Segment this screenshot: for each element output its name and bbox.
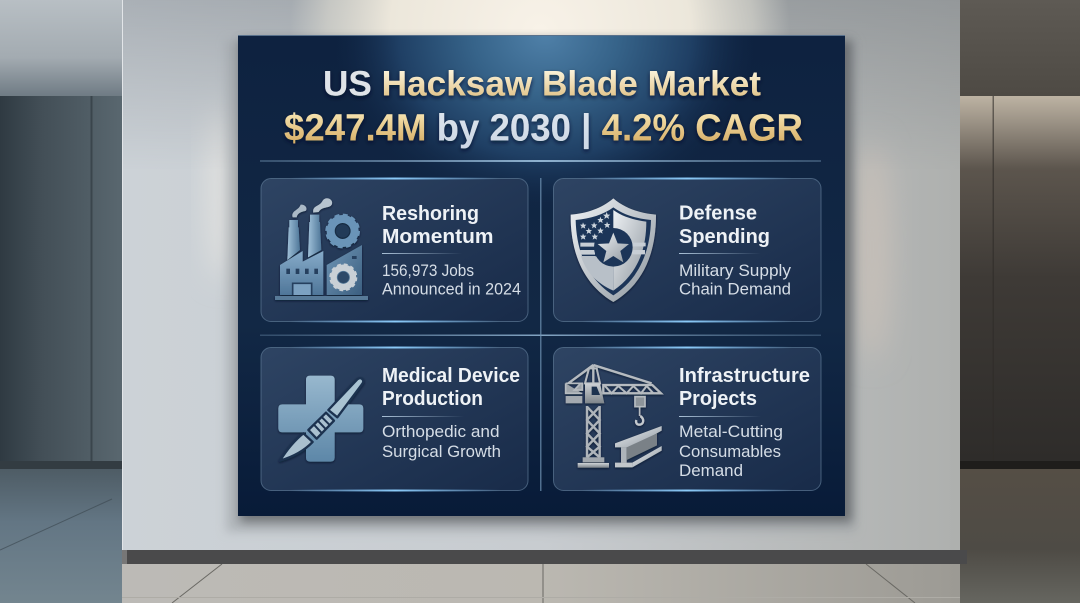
heading: defense spending: Defense	[679, 202, 757, 224]
text: 156,973 jobs announced in 2024: 156,973 Jobs	[382, 262, 474, 280]
heading: defense spending: Spending	[679, 225, 770, 248]
panel: medical device production	[261, 346, 528, 492]
icon: medical cross with scalpel	[278, 376, 363, 462]
text: metal-cutting consumables demand: Metal-Cutting	[679, 423, 783, 441]
header divider	[260, 160, 821, 162]
title line 1: US Hacksaw Blade Market	[323, 64, 761, 104]
heading: medical device production: Production	[382, 387, 483, 410]
icon: factory with gears	[275, 198, 368, 300]
heading: defense spending	[679, 202, 770, 248]
heading: infrastructure projects: Projects	[679, 387, 757, 410]
text: metal-cutting consumables demand: Demand	[679, 462, 743, 480]
navy display board	[238, 35, 845, 516]
icon: shield with star	[571, 198, 656, 302]
quadrant cross dividers	[260, 178, 821, 491]
text: 156,973 jobs announced in 2024: Announced in 2024	[382, 280, 521, 298]
heading: reshoring momentum: Momentum	[382, 225, 494, 248]
text: military supply chain demand: Chain Demand	[679, 280, 791, 298]
heading: medical device production	[382, 364, 520, 410]
text: metal-cutting consumables demand: Consumables	[679, 443, 781, 461]
background: left corridor	[0, 0, 122, 603]
text: 156,973 jobs announced in 2024	[382, 262, 521, 298]
panel: infrastructure projects	[554, 346, 821, 492]
title	[284, 64, 803, 150]
board shadow	[226, 40, 856, 532]
background: floor in front of wall	[122, 550, 967, 603]
text: military supply chain demand: Military Supply	[679, 262, 792, 280]
heading: infrastructure projects: Infrastructure	[679, 364, 810, 387]
title line 2: $247.4M by 2030 | 4.2% CAGR	[284, 108, 803, 150]
background: white feature wall	[122, 0, 960, 550]
heading: reshoring momentum: Reshoring	[382, 202, 479, 225]
panel: defense spending	[554, 178, 821, 322]
heading: reshoring momentum	[382, 202, 494, 248]
text: metal-cutting consumables demand	[679, 423, 783, 480]
icon: tower crane with steel beam	[566, 365, 662, 468]
text: military supply chain demand	[679, 262, 792, 298]
heading: infrastructure projects	[679, 364, 810, 410]
heading: medical device production: Medical Device	[382, 364, 520, 387]
text: orthopedic and surgical growth	[382, 423, 501, 461]
panel: reshoring momentum	[261, 178, 528, 322]
text: orthopedic and surgical growth: Orthopedic and	[382, 423, 500, 441]
background: right corridor	[960, 0, 1080, 603]
text: orthopedic and surgical growth: Surgical Growth	[382, 443, 501, 461]
